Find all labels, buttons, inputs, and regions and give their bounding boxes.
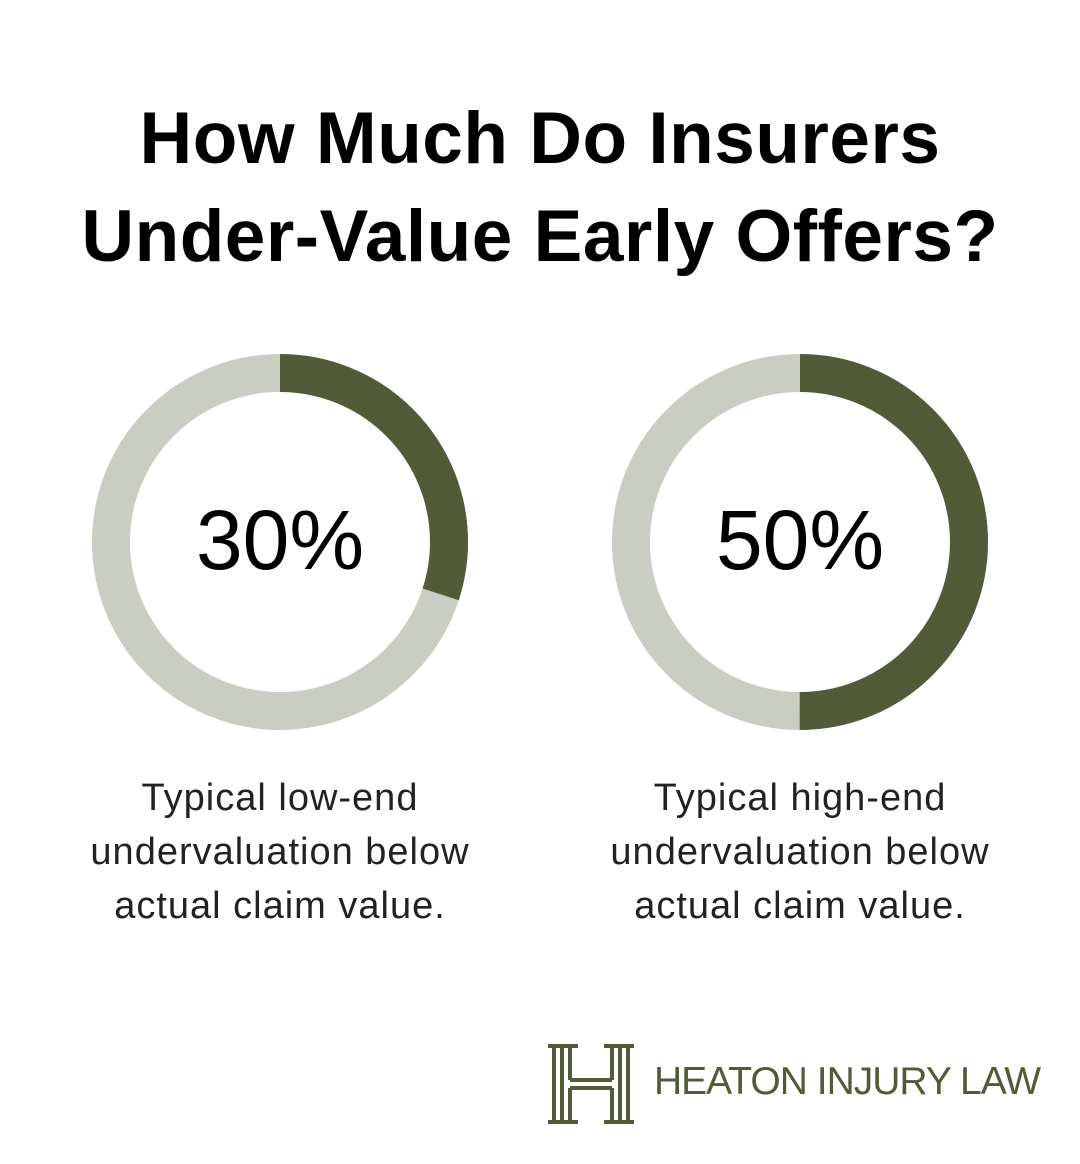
chart: 30% donut: 30% [196, 493, 364, 587]
brand name: HEATON INJURY LAW [654, 1060, 1040, 1103]
text: high-end description: actual claim value. [634, 885, 966, 927]
text: high-end description [610, 777, 990, 927]
text: low-end description: actual claim value. [114, 885, 446, 927]
text: low-end description: undervaluation below [90, 831, 470, 873]
text: low-end description [90, 777, 470, 927]
title: Under-Value Early Offers? [81, 196, 999, 277]
chart: 50% donut [612, 354, 988, 730]
title: How Much Do Insurers [140, 98, 940, 179]
icon: H monogram [548, 1044, 634, 1124]
chart: 30% donut [92, 354, 468, 730]
chart: 50% donut: 50% [716, 493, 884, 587]
text: high-end description: Typical high-end [654, 777, 946, 819]
logo [548, 1044, 1041, 1124]
title [81, 98, 999, 277]
text: low-end description: Typical low-end [142, 777, 418, 819]
text: high-end description: undervaluation below [610, 831, 990, 873]
